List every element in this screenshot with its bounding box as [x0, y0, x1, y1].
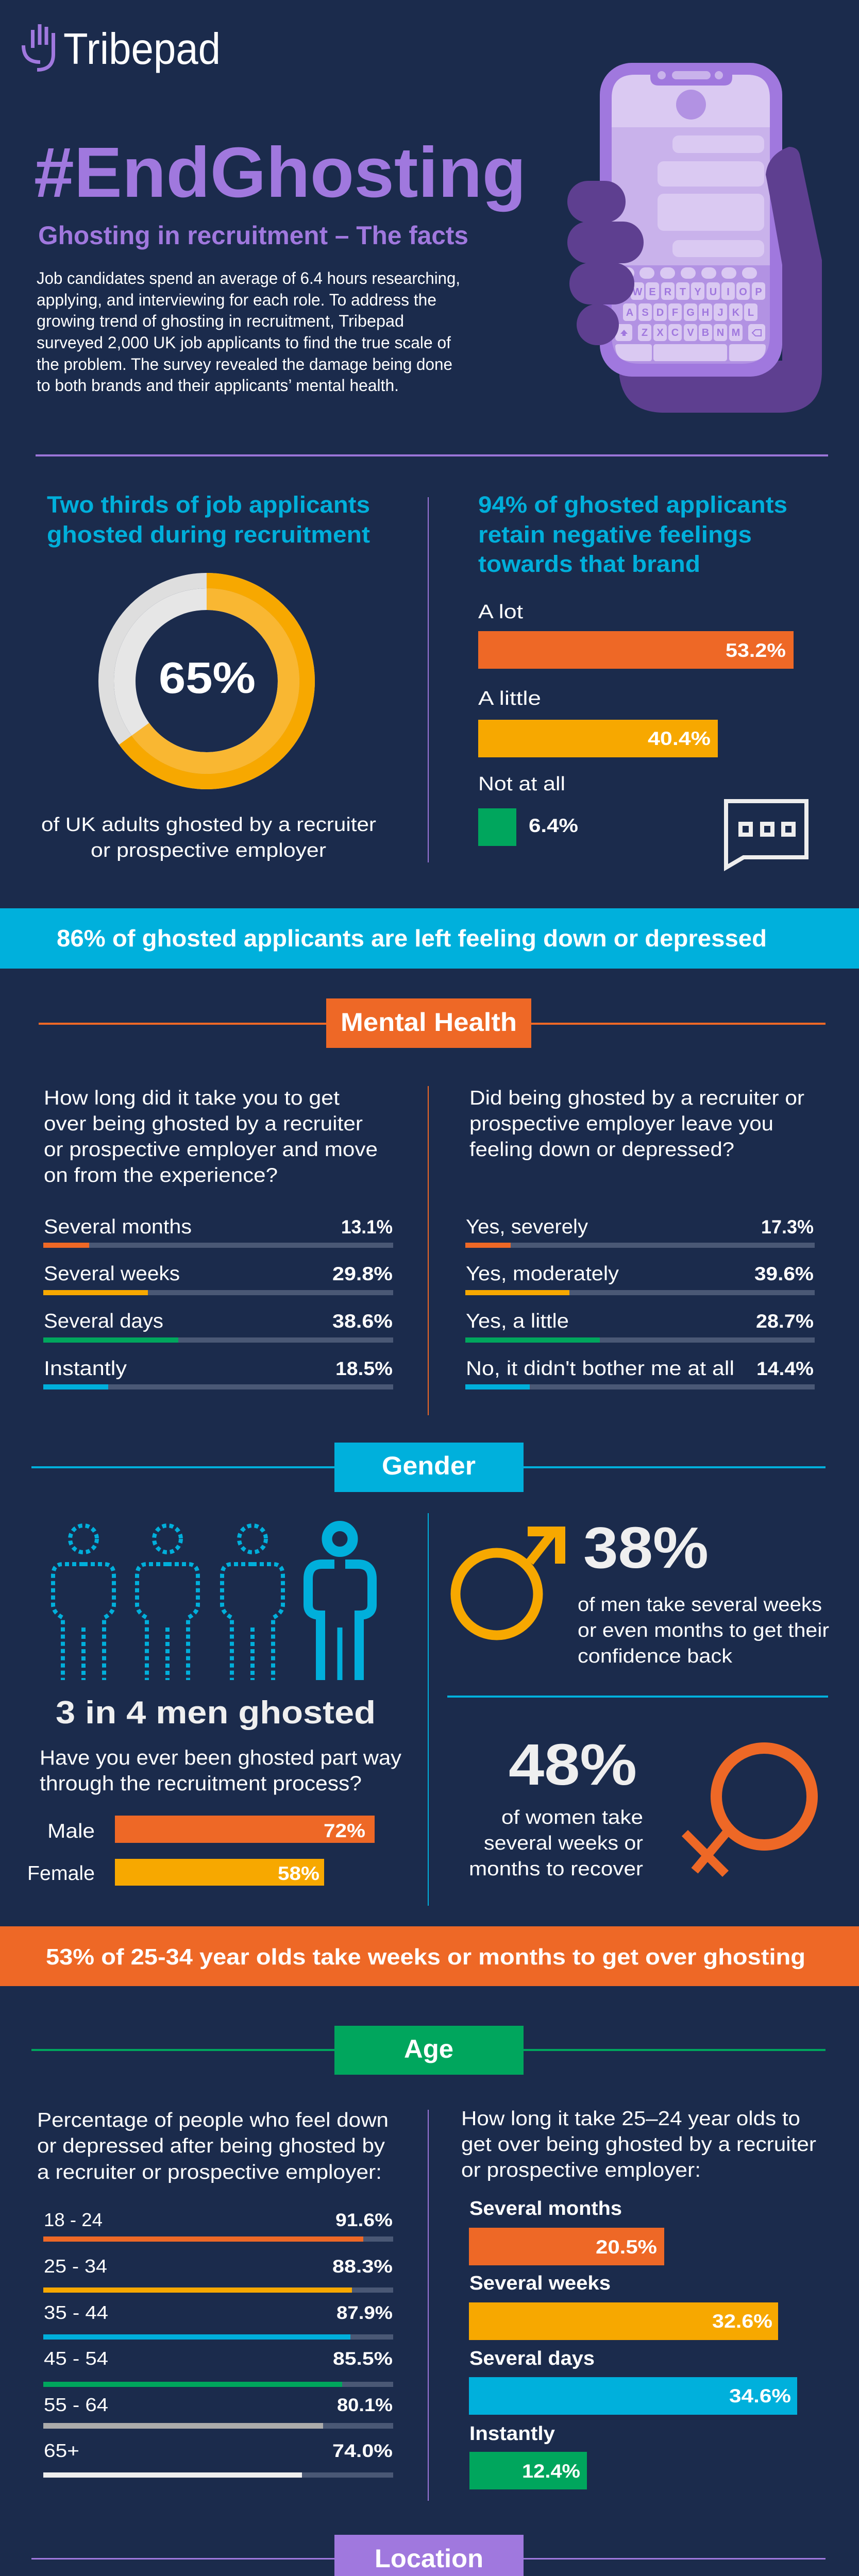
- row: 65+: 74.0%: [332, 2441, 393, 2461]
- panel: 38% of men: [456, 1515, 829, 1667]
- fingers and thumb: [567, 147, 822, 366]
- divider: [428, 2110, 429, 2501]
- row: 18-24: 91.6%: [335, 2210, 393, 2230]
- section heading: Gender: [31, 1443, 826, 1492]
- row: yes moderately: 39.6%: [754, 1263, 814, 1284]
- bar: several months: [469, 2198, 664, 2265]
- row: no: No, it didn't bother me at all: [466, 1358, 734, 1380]
- keyboard: D: [656, 307, 664, 318]
- stat text: months to recover: [469, 1858, 643, 1880]
- bar: male: 72%: [324, 1820, 365, 1841]
- row: several months: Several months: [44, 1216, 192, 1238]
- divider: [36, 454, 828, 456]
- question: on from the experience?: [44, 1164, 278, 1187]
- intro text: growing trend of ghosting in recruitment, Tribepad: [37, 312, 404, 330]
- stat value: 38%: [583, 1515, 709, 1580]
- icon: male symbol: [456, 1527, 565, 1635]
- keyboard: I: [727, 286, 730, 298]
- stat text: [469, 1807, 643, 1880]
- bar: not at all: [478, 773, 578, 846]
- row: 35-44: 35 - 44: [44, 2302, 108, 2323]
- bar: male: [47, 1816, 375, 1843]
- intro text: the problem. The survey revealed the damage being done: [37, 355, 452, 374]
- keyboard: V: [687, 327, 694, 338]
- row: instantly: [43, 1358, 393, 1389]
- donut chart 65%: [106, 581, 307, 782]
- section heading: Location: [31, 2535, 826, 2576]
- question: How long it take 25–24 year olds to: [461, 2108, 800, 2130]
- bar: a lot: 53.2%: [726, 640, 786, 661]
- question: [461, 2108, 816, 2181]
- keyboard: G: [686, 307, 695, 318]
- keyboard: K: [732, 307, 740, 318]
- panel: feeling down or depressed: [465, 1087, 815, 1389]
- row: yes a little: Yes, a little: [466, 1310, 569, 1332]
- bar: female: [27, 1859, 324, 1886]
- heading: towards that brand: [478, 551, 700, 577]
- keyboard: J: [717, 307, 723, 318]
- question: [40, 1747, 401, 1795]
- bar: a little: [478, 688, 718, 757]
- caption: of UK adults ghosted by a recruiter: [41, 814, 376, 836]
- bar: several days: Several days: [469, 2348, 595, 2369]
- heading: ghosted during recruitment: [47, 521, 370, 548]
- row: 65+: [43, 2440, 393, 2478]
- subtitle: Ghosting in recruitment – The facts: [38, 221, 468, 250]
- row: 35-44: [43, 2302, 393, 2340]
- bar: female: 58%: [278, 1863, 319, 1884]
- stat text: or even months to get their: [578, 1620, 829, 1641]
- phone body: [600, 63, 782, 377]
- panel: 3 in 4 men: [27, 1526, 401, 1886]
- icon: speech bubble: [726, 801, 806, 868]
- bar: female: Female: [27, 1862, 95, 1885]
- divider: [428, 1513, 429, 1906]
- panel: 94% negative feelings: [478, 492, 806, 868]
- keyboard: T: [680, 286, 686, 298]
- panel: two thirds ghosted: [41, 492, 376, 861]
- section heading: Age: Age: [404, 2035, 453, 2063]
- row: yes a little: 28.7%: [756, 1311, 814, 1332]
- bar: several weeks: [469, 2273, 778, 2340]
- row: 25-34: [43, 2256, 393, 2293]
- question: feeling down or depressed?: [469, 1139, 734, 1161]
- question: get over being ghosted by a recruiter: [461, 2133, 816, 2156]
- question: Have you ever been ghosted part way: [40, 1747, 401, 1769]
- bar: several weeks: Several weeks: [469, 2273, 611, 2294]
- stat text: of men take several weeks: [578, 1594, 822, 1616]
- banner: 53%: [0, 1926, 859, 1986]
- bar: a little: A little: [478, 688, 541, 709]
- icon: female symbol: [685, 1748, 812, 1874]
- row: several days: Several days: [44, 1310, 163, 1332]
- row: 45-54: 45 - 54: [44, 2348, 108, 2369]
- question: Did being ghosted by a recruiter or: [469, 1087, 804, 1109]
- row: yes severely: 17.3%: [761, 1216, 814, 1238]
- keyboard: S: [642, 307, 649, 318]
- bar: not at all: Not at all: [478, 773, 565, 795]
- stat text: of women take: [501, 1807, 643, 1828]
- section heading: Mental Health: Mental Health: [341, 1008, 517, 1037]
- banner: 86%: [0, 908, 859, 969]
- question: through the recruitment process?: [40, 1772, 362, 1795]
- keyboard: O: [739, 286, 747, 298]
- intro text: to both brands and their applicants’ mental health.: [37, 376, 399, 395]
- banner: 53%: 53% of 25-34 year olds take weeks or months to get over ghosting: [46, 1944, 805, 1970]
- stat value: 48%: [509, 1732, 637, 1797]
- keyboard: L: [748, 307, 754, 318]
- row: 55-64: 80.1%: [337, 2395, 393, 2415]
- question: How long did it take you to get: [44, 1087, 340, 1109]
- heading: Two thirds of job applicants: [47, 492, 370, 518]
- question: [469, 1087, 804, 1161]
- stat heading: 3 in 4 men ghosted: [56, 1695, 376, 1731]
- question: prospective employer leave you: [469, 1113, 773, 1135]
- row: instantly: 18.5%: [335, 1358, 393, 1379]
- bar: instantly: 12.4%: [522, 2461, 580, 2482]
- keyboard: A: [626, 307, 633, 318]
- illustration: hand holding phone: [567, 63, 822, 413]
- intro text: surveyed 2,000 UK job applicants to find the true scale of: [37, 333, 451, 352]
- section heading: Gender: Gender: [382, 1451, 476, 1480]
- bar: a lot: A lot: [478, 601, 524, 623]
- icon: solid man: [308, 1526, 372, 1680]
- bar: a little: 40.4%: [648, 728, 711, 749]
- question: Percentage of people who feel down: [37, 2109, 389, 2131]
- stat text: confidence back: [578, 1646, 733, 1667]
- row: 25-34: 88.3%: [332, 2257, 393, 2277]
- row: 45-54: [43, 2348, 393, 2387]
- row: yes moderately: Yes, moderately: [466, 1263, 619, 1285]
- bar: several days: 34.6%: [729, 2385, 791, 2406]
- heading: retain negative feelings: [478, 521, 752, 548]
- heading: 94% of ghosted applicants: [478, 492, 787, 518]
- divider: [447, 1696, 828, 1698]
- bar: several weeks: 32.6%: [712, 2311, 772, 2332]
- row: instantly: Instantly: [44, 1358, 127, 1380]
- keyboard: F: [672, 307, 678, 318]
- icon: ghosted man 1: [53, 1526, 114, 1680]
- icon: ghosted man 2: [137, 1526, 198, 1680]
- row: several months: 13.1%: [341, 1216, 393, 1238]
- question: over being ghosted by a recruiter: [44, 1113, 363, 1135]
- question: or depressed after being ghosted by: [37, 2135, 385, 2157]
- question: or prospective employer:: [461, 2159, 701, 2181]
- stat text: [578, 1594, 829, 1667]
- bar: male: Male: [47, 1820, 95, 1842]
- donut value: 65%: [159, 654, 256, 703]
- section heading: Location: Location: [375, 2544, 483, 2573]
- row: several weeks: Several weeks: [44, 1263, 180, 1285]
- bar: a lot: [478, 601, 794, 669]
- keyboard: X: [656, 327, 664, 338]
- title: #EndGhosting: [34, 133, 526, 212]
- bar: instantly: [469, 2423, 587, 2489]
- keyboard: P: [755, 286, 762, 298]
- row: yes severely: Yes, severely: [466, 1216, 588, 1238]
- palm: [619, 361, 822, 413]
- intro text: Job candidates spend an average of 6.4 hours researching,: [37, 269, 460, 287]
- keyboard: C: [671, 327, 679, 338]
- section heading: Age: [31, 2026, 826, 2075]
- section heading: Mental Health: [39, 998, 826, 1048]
- row: 18-24: 18 - 24: [44, 2209, 103, 2230]
- divider: [428, 1086, 429, 1415]
- row: several days: 38.6%: [332, 1311, 393, 1332]
- banner: 86%: 86% of ghosted applicants are left feeling down or depressed: [57, 925, 767, 952]
- heading: [47, 492, 370, 548]
- panel: 25-34 year olds recovery: [461, 2108, 816, 2489]
- phone screen: [612, 71, 770, 364]
- row: yes a little: [465, 1310, 815, 1343]
- keyboard: B: [702, 327, 709, 338]
- intro text: [37, 269, 460, 395]
- keyboard: N: [717, 327, 724, 338]
- keyboard: [615, 267, 766, 361]
- divider: [428, 497, 429, 862]
- logo: Tribepad: Tribepad: [63, 25, 221, 74]
- row: several weeks: [43, 1263, 393, 1295]
- keyboard: R: [664, 286, 672, 298]
- bar: several months: 20.5%: [596, 2236, 657, 2258]
- bar: not at all: 6.4%: [529, 815, 578, 836]
- icon: ghosted man 3: [222, 1526, 283, 1680]
- heading: [478, 492, 787, 577]
- panel: 48% of women: [469, 1732, 812, 1880]
- row: 55-64: 55 - 64: [44, 2394, 108, 2415]
- keyboard: Y: [694, 286, 701, 298]
- keyboard: E: [649, 286, 656, 298]
- row: several days: [43, 1310, 393, 1343]
- bar: instantly: Instantly: [469, 2423, 555, 2445]
- question: or prospective employer and move: [44, 1139, 378, 1161]
- row: yes severely: [465, 1216, 815, 1248]
- row: no: 14.4%: [756, 1358, 814, 1379]
- row: 18-24: [43, 2209, 393, 2242]
- panel: age depressed percentages: [37, 2109, 393, 2478]
- question: a recruiter or prospective employer:: [37, 2161, 382, 2183]
- question: [44, 1087, 378, 1187]
- row: several weeks: 29.8%: [332, 1263, 393, 1284]
- row: 45-54: 85.5%: [333, 2349, 393, 2369]
- row: no: [465, 1358, 815, 1389]
- row: yes moderately: [465, 1263, 815, 1295]
- row: 35-44: 87.9%: [336, 2303, 393, 2323]
- bar: several months: Several months: [469, 2198, 622, 2219]
- keyboard: U: [710, 286, 717, 298]
- panel: how long to get over: [43, 1087, 393, 1389]
- row: 65+: 65+: [44, 2440, 79, 2461]
- row: several months: [43, 1216, 393, 1248]
- row: 55-64: [43, 2394, 393, 2429]
- keyboard: M: [732, 327, 740, 338]
- row: 25-34: 25 - 34: [44, 2256, 107, 2277]
- stat text: several weeks or: [484, 1833, 643, 1854]
- keyboard: H: [702, 307, 709, 318]
- keyboard: Z: [642, 327, 648, 338]
- keyboard: W: [633, 286, 643, 298]
- question: [37, 2109, 389, 2183]
- bar: several days: [469, 2348, 797, 2415]
- caption: or prospective employer: [91, 840, 326, 861]
- intro text: applying, and interviewing for each role. To address the: [37, 291, 436, 309]
- caption: [41, 814, 376, 861]
